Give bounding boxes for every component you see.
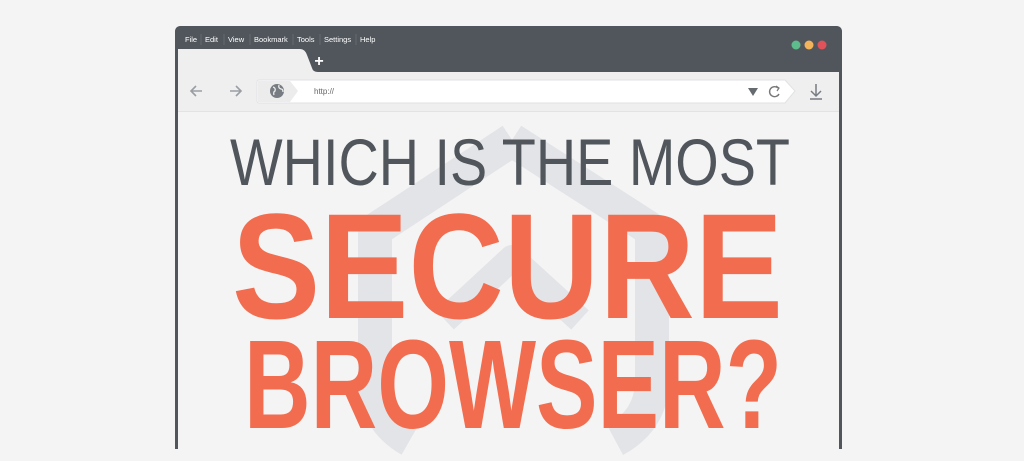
download icon [810,84,822,99]
menu bar: Settings [324,35,351,44]
menu bar: Tools [297,35,315,44]
shield watermark [375,140,652,440]
menu bar: File [185,35,197,44]
menu bar [185,34,375,45]
menu bar: Bookmark [254,35,288,44]
new tab plus: + [314,53,324,70]
address bar [257,80,795,103]
window buttons [792,40,826,50]
browser frame [175,26,842,449]
heading line 1: WHICH IS THE MOST [230,125,790,199]
nav arrows [191,86,241,96]
heading line 2: SECURE [232,182,783,350]
heading line 3: BROWSER? [244,314,782,455]
menu bar: Help [360,35,375,44]
menu bar: View [228,35,245,44]
toolbar [178,72,839,112]
menu bar: Edit [205,35,219,44]
tab [178,49,318,72]
address bar: http:// [314,87,335,96]
